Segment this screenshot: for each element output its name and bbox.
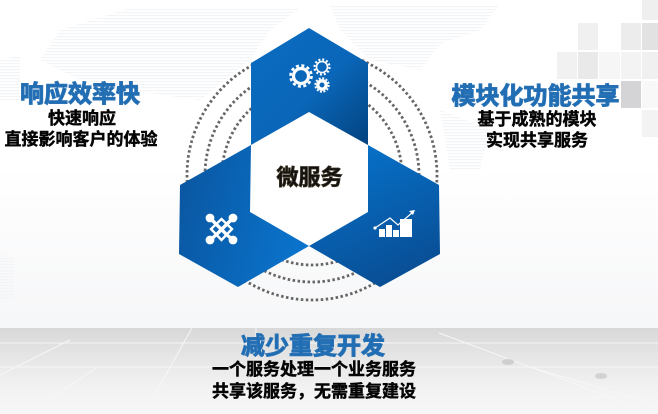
decorative squares: [557, 0, 658, 137]
text block: module sharing: 模块化功能共享: [452, 83, 620, 110]
icon: gears: [290, 60, 330, 92]
text block: module sharing: 实现共享服务: [486, 130, 588, 150]
text block: reduce duplicate development: 减少重复开发: [241, 333, 385, 360]
dotted concentric circles: [187, 50, 437, 300]
left blue hexagon: [179, 145, 309, 287]
icon: joomla knot: [206, 214, 237, 244]
text block: response efficiency: 直接影响客户的体验: [4, 129, 158, 149]
text block: response efficiency: 快速响应: [48, 108, 116, 128]
text block: reduce duplicate development: 共享该服务，无需重复建设: [212, 381, 416, 401]
center label: 微服务: [276, 165, 343, 190]
text block: reduce duplicate development: 一个服务处理一个业务服务: [212, 360, 416, 379]
text block: module sharing: 基于成熟的模块: [478, 109, 596, 129]
top blue hexagon: [251, 28, 368, 145]
icon: rising bar chart: [373, 210, 415, 237]
text block: response efficiency: 响应效率快: [20, 81, 140, 108]
text block: module sharing: [452, 83, 620, 150]
center hexagon: [251, 112, 368, 247]
text block: response efficiency: [4, 81, 158, 149]
right blue hexagon: [309, 145, 440, 287]
text block: reduce duplicate development: [212, 333, 416, 401]
